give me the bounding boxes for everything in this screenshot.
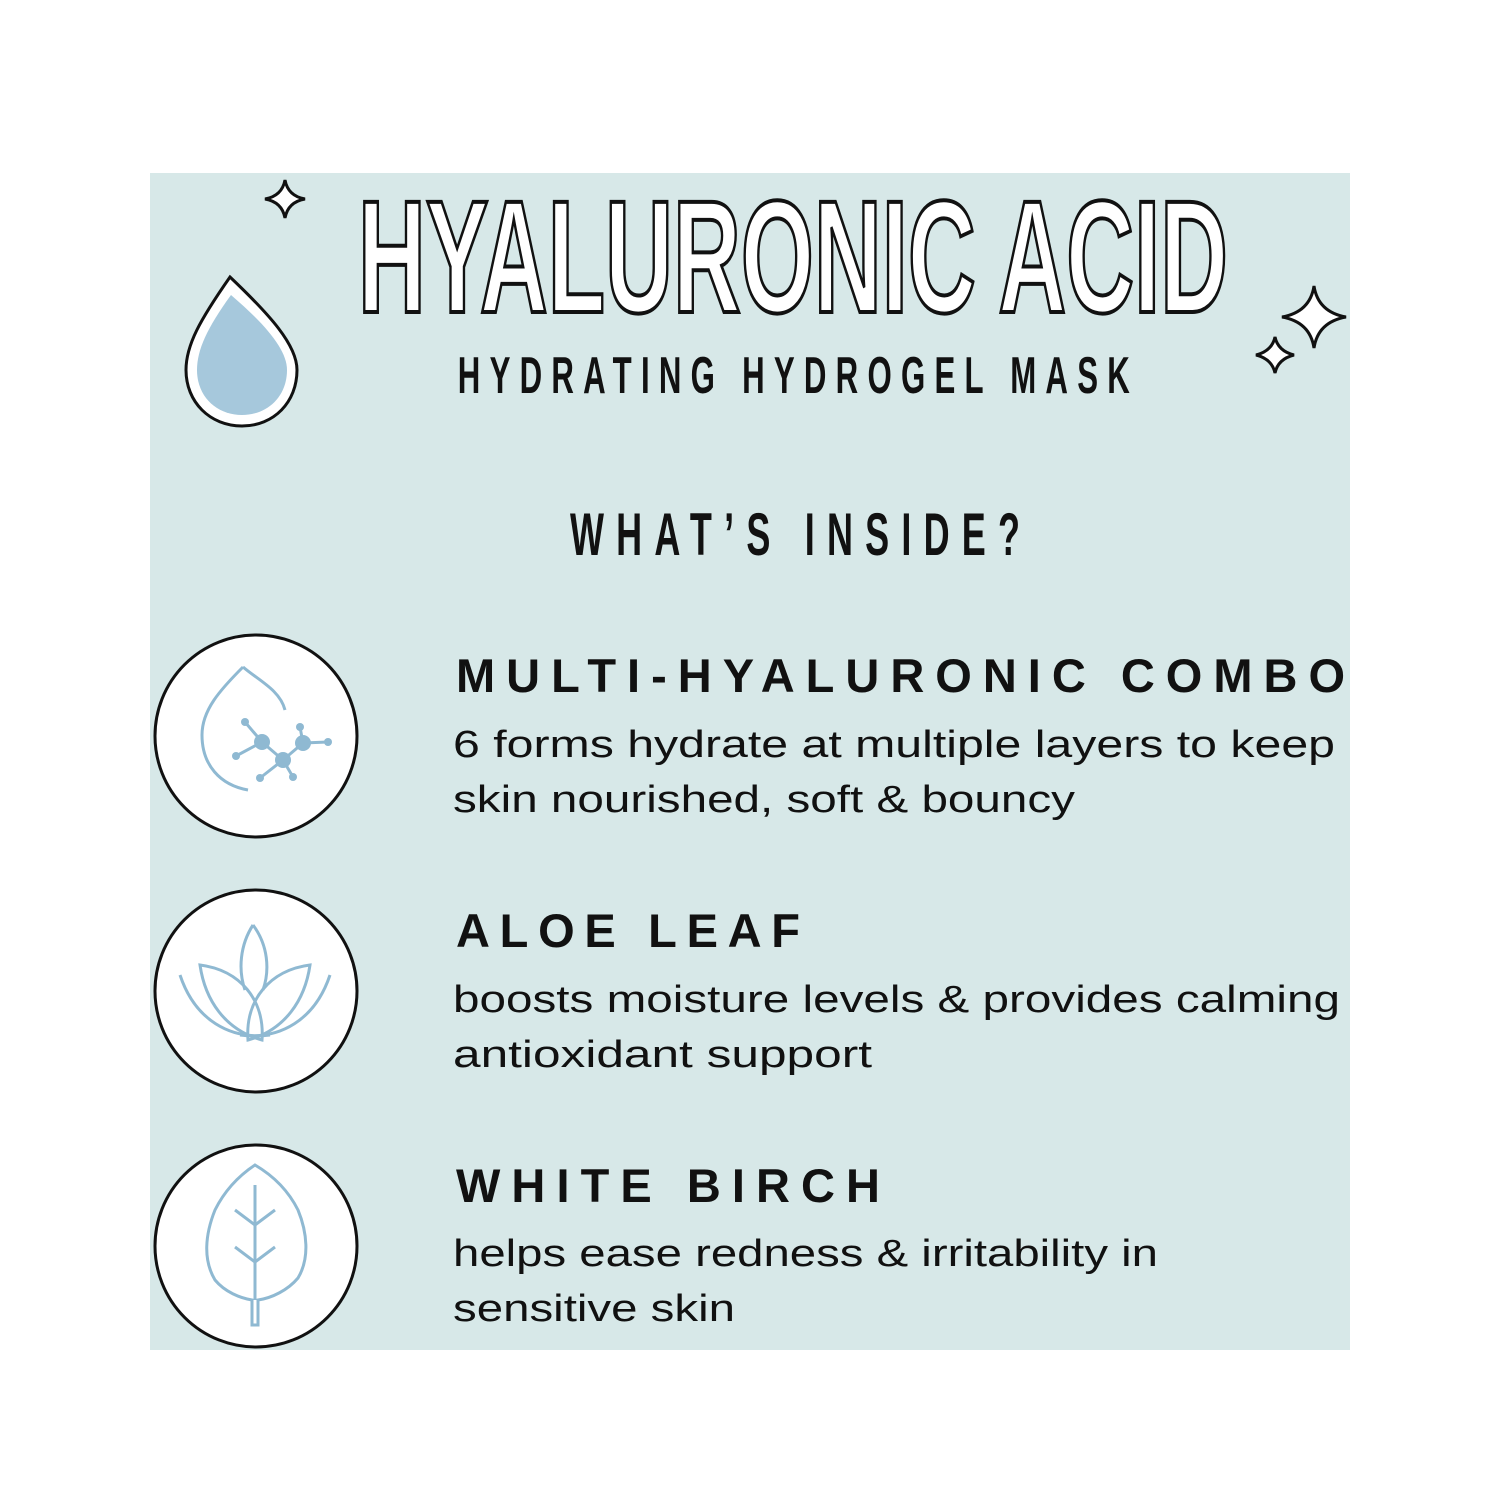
icon: aloe circle bbox=[155, 890, 357, 1092]
ingredient: aloe leaf bbox=[453, 904, 1340, 1076]
icon: sparkle top left bbox=[265, 180, 305, 218]
ingredient: aloe leaf: antioxidant support bbox=[453, 1034, 873, 1076]
ingredient: aloe leaf: ALOE LEAF bbox=[456, 904, 800, 957]
ingredient: multi-hyaluronic combo: 6 forms hydrate at multiple layers to keep bbox=[453, 724, 1335, 766]
icon: birch leaf circle bbox=[155, 1145, 357, 1347]
ingredient: white birch: WHITE BIRCH bbox=[456, 1159, 880, 1212]
icon: water drop bbox=[186, 277, 297, 426]
icon: sparkles right bbox=[1256, 286, 1346, 373]
panel: background bbox=[150, 173, 1350, 1350]
ingredient: white birch: sensitive skin bbox=[453, 1288, 735, 1330]
subtitle: HYDRATING HYDROGEL MASK bbox=[458, 347, 1130, 405]
ingredient: multi-hyaluronic combo: MULTI-HYALURONIC COMBO bbox=[456, 649, 1345, 702]
ingredient: white birch: helps ease redness & irritability in bbox=[453, 1233, 1158, 1275]
icon: molecule circle bbox=[155, 635, 357, 837]
ingredient: aloe leaf: boosts moisture levels & provides calming bbox=[453, 979, 1340, 1021]
ingredient: multi-hyaluronic combo bbox=[453, 649, 1345, 821]
ingredient: white birch bbox=[453, 1159, 1158, 1330]
heading: what's inside: WHAT’S INSIDE? bbox=[570, 502, 1020, 568]
ingredient: multi-hyaluronic combo: skin nourished, soft & bouncy bbox=[453, 779, 1075, 821]
